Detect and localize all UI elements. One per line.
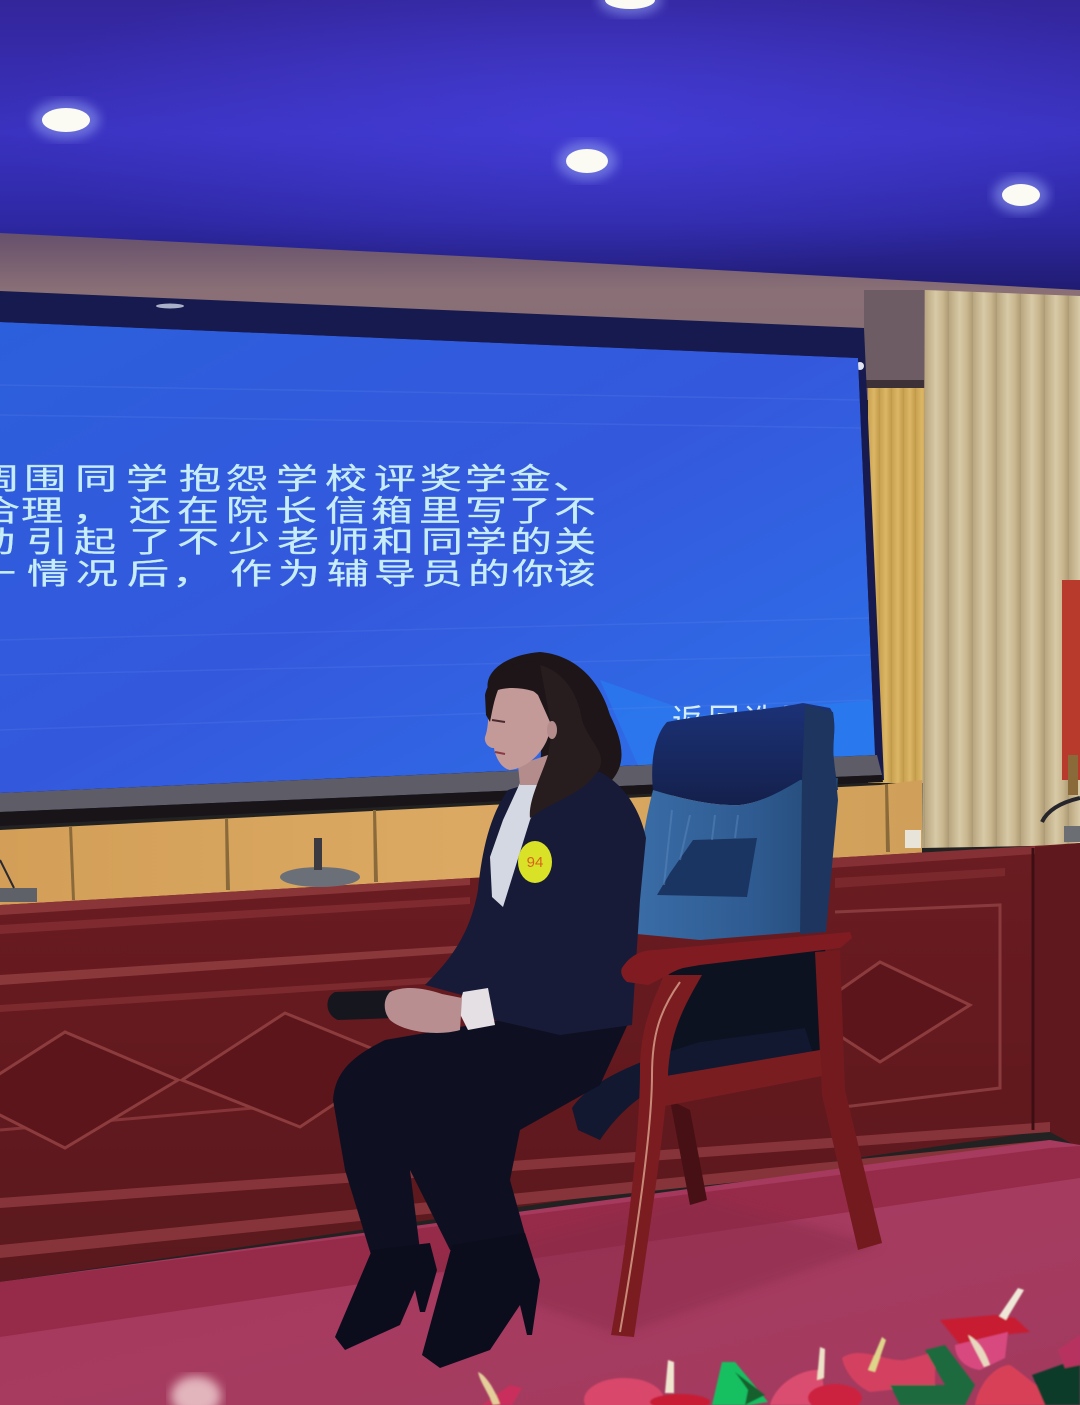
hair back <box>488 652 622 825</box>
red spathe top <box>940 1315 1030 1345</box>
pink spathe bottom right <box>975 1365 1062 1405</box>
chair back leg <box>670 1100 707 1205</box>
chair rail <box>660 1050 822 1106</box>
face <box>485 685 550 770</box>
curtain <box>922 290 1080 848</box>
spadix centre <box>817 1347 825 1380</box>
chair cushion crease <box>657 838 757 897</box>
screen text <box>0 462 596 590</box>
dark leaf <box>735 1372 765 1405</box>
trouser legs <box>333 1015 632 1258</box>
flower far left <box>478 1372 522 1405</box>
hands <box>385 988 462 1033</box>
green leaf <box>712 1362 768 1405</box>
ceiling lights <box>32 0 1049 214</box>
magenta flower far right <box>1058 1335 1080 1368</box>
chair arm rest <box>621 932 852 985</box>
chair arm and front leg <box>611 932 852 1337</box>
chair back upper cushion <box>652 703 838 805</box>
red banner <box>1062 580 1080 780</box>
spadix mid <box>968 1335 990 1367</box>
return button text: 返回选题 <box>672 703 812 738</box>
dark leaves right <box>1032 1358 1080 1405</box>
magenta spathe <box>955 1332 1008 1370</box>
handheld microphone <box>327 990 395 1020</box>
anthurium flowers <box>478 1288 1080 1405</box>
projection screen <box>0 322 875 793</box>
neck <box>518 755 548 785</box>
red spathe centre <box>808 1384 862 1405</box>
spadix yellow <box>868 1337 886 1372</box>
lower wood wall panels <box>0 780 922 910</box>
office chair back and seat <box>572 703 882 1250</box>
pink flower right cluster <box>842 1352 935 1392</box>
spadix top <box>999 1288 1024 1320</box>
screen frame <box>0 291 884 826</box>
floor carpet <box>0 1140 1080 1405</box>
seated woman <box>327 652 646 1368</box>
pale blur at lower left <box>171 1376 221 1405</box>
chair cushion folds <box>664 810 738 885</box>
fringe <box>485 662 550 722</box>
chair right front leg <box>815 950 882 1250</box>
hair front <box>530 665 601 818</box>
number sticker: 94 <box>527 854 543 871</box>
jacket <box>425 772 646 1035</box>
white turtleneck <box>490 783 547 907</box>
chair side panel <box>800 705 838 934</box>
front boot <box>422 1233 540 1368</box>
chair seat cushion <box>572 1028 815 1140</box>
chair leg highlight <box>620 982 680 1332</box>
chair back lower cushion <box>637 778 838 940</box>
chair dark underside <box>660 945 830 1080</box>
right column <box>864 290 925 783</box>
number sticker <box>518 841 552 883</box>
spadix centre left <box>665 1360 674 1393</box>
desk <box>0 843 1080 1282</box>
desk diamond panels <box>0 962 970 1148</box>
eye and mouth <box>492 720 505 754</box>
shirt cuff <box>458 988 495 1030</box>
green leaves cluster <box>890 1345 975 1405</box>
pink spathe centre left <box>584 1378 664 1405</box>
pink spathe centre <box>770 1370 825 1405</box>
back boot <box>335 1243 437 1350</box>
chair left front leg <box>611 975 702 1337</box>
ceiling <box>0 0 1080 295</box>
wall band above screen <box>0 233 1080 400</box>
red spathe base <box>650 1394 710 1405</box>
ear <box>547 721 557 739</box>
desk microphones <box>0 755 1080 902</box>
